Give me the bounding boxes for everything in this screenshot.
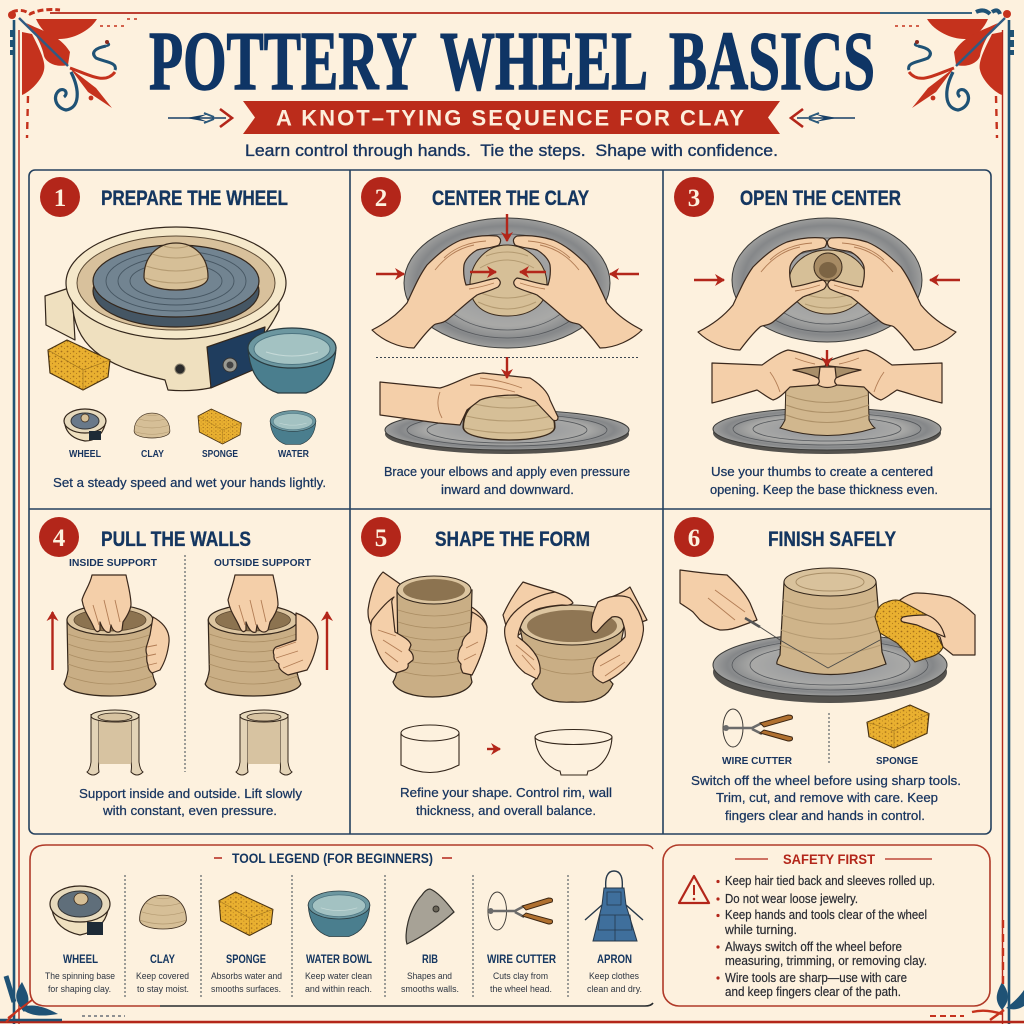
step 6 caption: fingers clear and hands in control.: [725, 808, 925, 823]
icon row: sponge: [198, 409, 241, 444]
legend item: water bowl: WATER BOWL: [306, 954, 372, 966]
legend item: clay: CLAY: [150, 954, 175, 966]
icon labels: SPONGE: [876, 755, 918, 767]
safety bullet list: Do not wear loose jewelry.: [725, 891, 858, 906]
panel: step 2 center the clay: [361, 177, 642, 497]
step 6 caption: Switch off the wheel before using sharp tools.: [691, 773, 961, 788]
step 5 number badge: [361, 517, 401, 557]
icon: warning triangle: [679, 876, 709, 903]
panel: step 4 pull the walls: [39, 517, 327, 818]
legend item: clay: Keep covered: [136, 971, 189, 982]
safety bullet list: while turning.: [724, 922, 797, 937]
sub-labels: OUTSIDE SUPPORT: [214, 557, 312, 569]
legend item: wheel: for shaping clay.: [48, 984, 111, 995]
icon labels: WIRE CUTTER: [722, 755, 792, 767]
arrows: upward lift: [52, 612, 327, 670]
diagram: outside wall section: [236, 710, 292, 775]
illustration: cutting off the pot: [680, 568, 975, 703]
legend item: wheel: The spinning base: [45, 971, 115, 982]
arrows: pressure top view: [376, 214, 639, 274]
icon row: clay: [134, 413, 170, 438]
icon labels: [722, 755, 918, 767]
panel: step 5 shape the form: [361, 517, 647, 818]
icon labels: WATER: [278, 448, 309, 460]
step 3 number badge: [674, 177, 714, 217]
legend item: rib: Shapes and: [407, 971, 452, 982]
icon: sponge: [867, 705, 929, 748]
step 3 caption: Use your thumbs to create a centered: [711, 464, 933, 479]
illustration: bowl form with hands: [503, 582, 647, 702]
sub-labels: INSIDE SUPPORT: [69, 557, 158, 569]
step 5 caption: Refine your shape. Control rim, wall: [400, 785, 612, 800]
arrows: pressure sides: [694, 279, 960, 281]
step 2 caption: Brace your elbows and apply even pressure: [384, 464, 630, 479]
illustration: side view thumbs opening: [712, 350, 942, 454]
step 1 number badge: 1: [54, 185, 66, 212]
illustration: top view hands centering: [372, 218, 642, 348]
step 6 number badge: [674, 517, 714, 557]
step 4 number badge: [39, 517, 79, 557]
step 5 caption: thickness, and overall balance.: [416, 803, 596, 818]
arrow: downward pressure: [506, 357, 508, 378]
ribbon flourish right: [791, 109, 855, 127]
diagram: cylinder outline: [401, 725, 459, 772]
illustration: side view hand on clay: [380, 373, 629, 454]
title: [149, 15, 875, 108]
step 2 number badge: [361, 177, 401, 217]
ribbon flourish left: [168, 109, 232, 127]
legend item: clay: [136, 895, 189, 995]
icon: wire cutter: [723, 709, 792, 747]
step 2 caption: inward and downward.: [441, 482, 574, 497]
corner ornament: bottom right: [930, 920, 1024, 1020]
illustration: large sponge: [48, 340, 110, 390]
illustration: pottery wheel: [45, 227, 286, 391]
safety heading: SAFETY FIRST: [783, 851, 875, 867]
legend heading: TOOL LEGEND (FOR BEGINNERS): [232, 850, 433, 866]
corner ornament: top right: [909, 18, 1012, 138]
step 2 heading: CENTER THE CLAY: [432, 187, 589, 210]
legend item: wire cutter: the wheel head.: [490, 984, 552, 995]
legend item: water bowl: Keep water clean: [305, 971, 372, 982]
arrow: form progression: [487, 748, 500, 750]
legend item: sponge: [211, 892, 282, 995]
subtitle ribbon: [243, 101, 780, 134]
legend item: water bowl: [305, 891, 372, 995]
corner ornament: bottom left: [6, 976, 125, 1022]
safety bullet list: Keep hands and tools clear of the wheel: [725, 907, 927, 922]
step 3 caption: [710, 464, 938, 497]
legend item: wire cutter: WIRE CUTTER: [487, 954, 557, 966]
icon labels: WHEEL: [69, 448, 101, 460]
safety bullet list: [716, 873, 935, 999]
panel: step 3 open the center: [674, 177, 960, 497]
arrow: downward opening: [826, 350, 828, 366]
legend item: wheel: [45, 886, 115, 995]
step 5 caption: [400, 785, 612, 818]
safety bullet list: Wire tools are sharp—use with care: [725, 970, 907, 985]
legend item: wire cutter: Cuts clay from: [493, 971, 548, 982]
safety bullet list: Always switch off the wheel before: [725, 939, 902, 954]
safety frame: [663, 845, 990, 1006]
safety bullet list: measuring, trimming, or removing clay.: [725, 953, 927, 968]
tagline: Learn control through hands. Tie the steps. Shape with confidence.: [245, 142, 778, 160]
step 4 caption: with constant, even pressure.: [102, 803, 277, 818]
step 6 heading: FINISH SAFELY: [768, 528, 896, 551]
panel: safety first: [663, 845, 990, 1006]
illustration: tall cylinder with hands: [368, 572, 487, 697]
legend item: wheel: WHEEL: [63, 954, 98, 966]
diagram: bowl outline: [535, 730, 612, 775]
illustration: outside support: [205, 575, 318, 696]
step 6 number badge: 6: [688, 525, 700, 552]
step 5 heading: SHAPE THE FORM: [435, 528, 590, 551]
subtitle ribbon: A KNOT–TYING SEQUENCE FOR CLAY: [276, 106, 744, 130]
illustration: water bowl: [248, 328, 336, 393]
step 3 caption: opening. Keep the base thickness even.: [710, 482, 938, 497]
step 4 caption: [79, 786, 303, 818]
step 1 caption: Set a steady speed and wet your hands lightly.: [53, 475, 326, 490]
legend item: apron: [585, 871, 643, 995]
diagram: inside wall section: [87, 710, 143, 775]
icon labels: [69, 448, 309, 460]
panel: tool legend: [30, 845, 653, 1006]
legend item: water bowl: and within reach.: [305, 984, 372, 995]
legend item: apron: clean and dry.: [587, 984, 642, 995]
corner ornament: top left: [12, 18, 115, 138]
illustration: inside support: [64, 575, 169, 696]
legend frame: [30, 845, 653, 1006]
step 2 number badge: 2: [375, 185, 387, 212]
step 6 caption: [691, 773, 961, 823]
legend item: rib: RIB: [422, 954, 438, 966]
step 5 number badge: 5: [375, 525, 387, 552]
sub-labels: [69, 557, 312, 569]
icon labels: SPONGE: [202, 448, 238, 460]
step 2 caption: [384, 464, 630, 497]
panel: step 1 prepare the wheel: [40, 177, 336, 490]
legend item: clay: to stay moist.: [137, 984, 189, 995]
illustration: top view opening: [698, 218, 956, 350]
legend item: apron: Keep clothes: [589, 971, 639, 982]
title: WHEEL: [440, 15, 648, 108]
legend item: rib: smooths walls.: [401, 984, 459, 995]
step 4 caption: Support inside and outside. Lift slowly: [79, 786, 303, 801]
step 1 heading: PREPARE THE WHEEL: [101, 187, 288, 210]
icon labels: CLAY: [141, 448, 164, 460]
step 3 heading: OPEN THE CENTER: [740, 187, 901, 210]
icon row: water: [270, 411, 316, 444]
legend item: sponge: Absorbs water and: [211, 971, 282, 982]
step 4 heading: PULL THE WALLS: [101, 528, 251, 551]
legend item: sponge: SPONGE: [226, 954, 266, 966]
legend item: apron: APRON: [597, 954, 632, 966]
title: BASICS: [669, 15, 875, 108]
step 4 number badge: 4: [53, 525, 66, 552]
safety bullet list: and keep fingers clear of the path.: [725, 984, 901, 999]
legend item: sponge: smooths surfaces.: [211, 984, 281, 995]
legend item: rib: [401, 889, 459, 995]
safety bullet list: Keep hair tied back and sleeves rolled up.: [725, 873, 935, 888]
step 1 number badge: [40, 177, 80, 217]
legend item: wire cutter: [487, 892, 557, 995]
step 3 number badge: 3: [688, 185, 700, 212]
steps grid frame: [29, 170, 991, 834]
step 6 caption: Trim, cut, and remove with care. Keep: [716, 790, 938, 805]
panel: step 6 finish safely: [674, 517, 975, 823]
title: POTTERY: [149, 15, 417, 108]
icon row: wheel: [64, 409, 106, 441]
